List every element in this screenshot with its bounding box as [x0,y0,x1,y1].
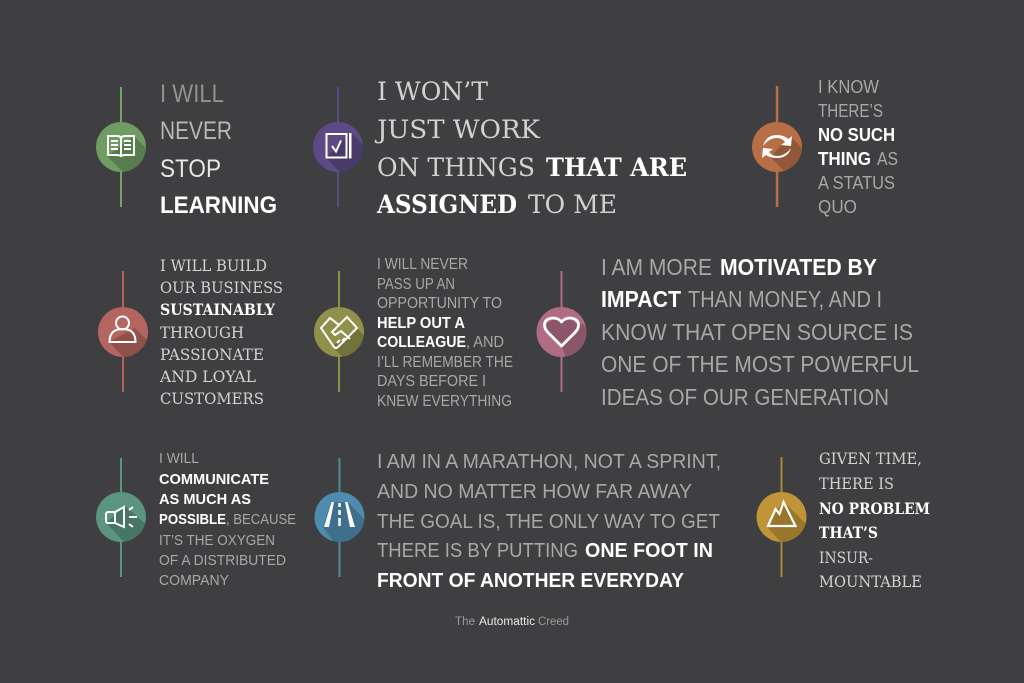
text: given time, no problem insurmountable: THAT’S [819,523,878,542]
text: I will build our business sustainably: SUSTAINABLY [160,300,276,319]
panel: communicate as much as possible [96,450,296,589]
panel: build business sustainably [98,257,283,408]
footer credit: Automattic [479,616,535,628]
panel: won't just work on assigned things [313,77,687,219]
text: I know there's no such thing as a status quo: THING [818,148,871,169]
text: I will never stop learning: NEVER [160,117,232,145]
text: communicate as much as possible: COMPANY [159,572,229,589]
text: I know there's no such thing as a status quo [818,76,898,217]
text: communicate as much as possible: , BECAUSE [226,511,296,528]
text: marathon, one foot in front of another: AND NO MATTER HOW FAR AWAY [377,481,692,503]
text: I will build our business sustainably: THROUGH [160,324,244,342]
text: I won't just work on things that are assigned to me: I WON’T [377,77,488,106]
icon: checkbox on purple circle [313,87,363,207]
text: communicate as much as possible: IT’S THE OXYGEN [159,532,275,549]
text: I will build our business sustainably: AND LOYAL [159,368,256,386]
text: I know there's no such thing as a status quo: I KNOW [818,76,879,97]
panel: never stop learning [96,80,277,219]
text: more motivated by impact than money: THAN MONEY, AND I [688,286,882,312]
icon: person on red circle [98,271,148,392]
text: I won't just work on things that are assigned to me: ASSIGNED [376,190,517,219]
text: I won't just work on things that are assigned to me [374,77,687,219]
text: I know there's no such thing as a status quo: QUO [818,196,857,217]
text: given time, no problem insurmountable: MOUNTABLE [819,572,922,591]
text: I won't just work on things that are assigned to me: TO ME [528,190,617,219]
text: marathon, one foot in front of another: THERE IS BY PUTTING [377,540,578,562]
text: marathon, one foot in front of another [377,451,721,592]
text: more motivated by impact than money: ONE OF THE MOST POWERFUL [601,351,919,377]
text: I will build our business sustainably [159,257,283,408]
text: I won't just work on things that are assigned to me: JUST WORK [374,115,541,144]
footer credit: The [455,616,475,628]
icon: megaphone on teal circle [96,458,146,577]
text: more motivated by impact than money [601,254,919,410]
text: marathon, one foot in front of another: I AM IN A MARATHON, NOT A SPRINT, [377,451,721,473]
text: I will build our business sustainably: I WILL BUILD [160,257,267,275]
icon: mountain on gold circle [756,457,806,577]
text: more motivated by impact than money: MOTIVATED BY [720,254,877,280]
text: never pass up an opportunity to help a colleague: HELP OUT A [377,315,465,332]
text: I will never stop learning: I WILL [160,80,224,108]
text: I won't just work on things that are assigned to me: ON THINGS [377,153,535,182]
text: never pass up an opportunity to help a colleague: KNEW EVERYTHING [377,393,512,410]
text: I will build our business sustainably: CUSTOMERS [160,390,264,408]
text: I know there's no such thing as a status quo: THERE’S [818,100,883,121]
panel: help out a colleague [314,256,513,410]
text: I know there's no such thing as a status quo: NO SUCH [818,124,895,145]
text: given time, no problem insurmountable: INSUR- [819,548,873,567]
text: I will never stop learning: STOP [160,155,221,183]
panel: marathon not a sprint [314,451,721,592]
text: communicate as much as possible: OF A DISTRIBUTED [159,552,286,569]
text: given time, no problem insurmountable [819,449,930,591]
text: never pass up an opportunity to help a colleague: I WILL NEVER [377,256,468,273]
text: given time, no problem insurmountable: THERE IS [819,474,894,493]
text: never pass up an opportunity to help a colleague: COLLEAGUE [377,334,466,351]
text: communicate as much as possible [159,450,296,589]
footer credit: Creed [538,616,569,628]
text: never pass up an opportunity to help a colleague: I’LL REMEMBER THE [377,354,513,371]
panel: no problem insurmountable [756,449,930,591]
panel: no such thing as status quo [752,76,898,217]
icon: refresh arrows on orange circle [752,86,802,207]
text: I know there's no such thing as a status quo: AS [877,148,898,169]
text: communicate as much as possible: I WILL [159,450,199,467]
text: never pass up an opportunity to help a colleague: OPPORTUNITY TO [377,295,502,312]
icon: open book on green circle [96,87,146,207]
text: more motivated by impact than money: I AM MORE [601,254,712,280]
text: more motivated by impact than money: KNOW THAT OPEN SOURCE IS [601,319,913,345]
text: I won't just work on things that are assigned to me: THAT ARE [546,153,687,182]
text: marathon, one foot in front of another: ONE FOOT IN [585,540,713,562]
text: I know there's no such thing as a status quo: A STATUS [818,172,895,193]
text: communicate as much as possible: POSSIBLE [159,511,226,528]
panel: motivated by impact [536,254,919,410]
text: more motivated by impact than money: IDEAS OF OUR GENERATION [601,384,889,410]
text: I will build our business sustainably: OUR BUSINESS [160,279,283,297]
text: given time, no problem insurmountable: GIVEN TIME, [819,449,922,468]
text: given time, no problem insurmountable: NO PROBLEM [819,499,930,518]
text: never pass up an opportunity to help a colleague [377,256,513,410]
text: never pass up an opportunity to help a colleague: , AND [466,334,504,351]
text: never pass up an opportunity to help a colleague: PASS UP AN [377,276,455,293]
text: I will never stop learning: LEARNING [160,192,277,219]
footer credit [455,616,569,628]
text: I will build our business sustainably: PASSIONATE [160,346,264,364]
text: communicate as much as possible: AS MUCH AS [159,491,251,508]
icon: handshake on olive circle [314,271,364,392]
icon: road on blue circle [314,458,364,577]
text: marathon, one foot in front of another: FRONT OF ANOTHER EVERYDAY [377,570,685,592]
icon: heart on pink circle [536,271,586,392]
text: never pass up an opportunity to help a colleague: DAYS BEFORE I [377,373,486,390]
text: more motivated by impact than money: IMPACT [601,286,681,312]
text: communicate as much as possible: COMMUNICATE [159,471,269,488]
text: marathon, one foot in front of another: THE GOAL IS, THE ONLY WAY TO GET [377,511,720,533]
text: I will never stop learning [160,80,277,219]
